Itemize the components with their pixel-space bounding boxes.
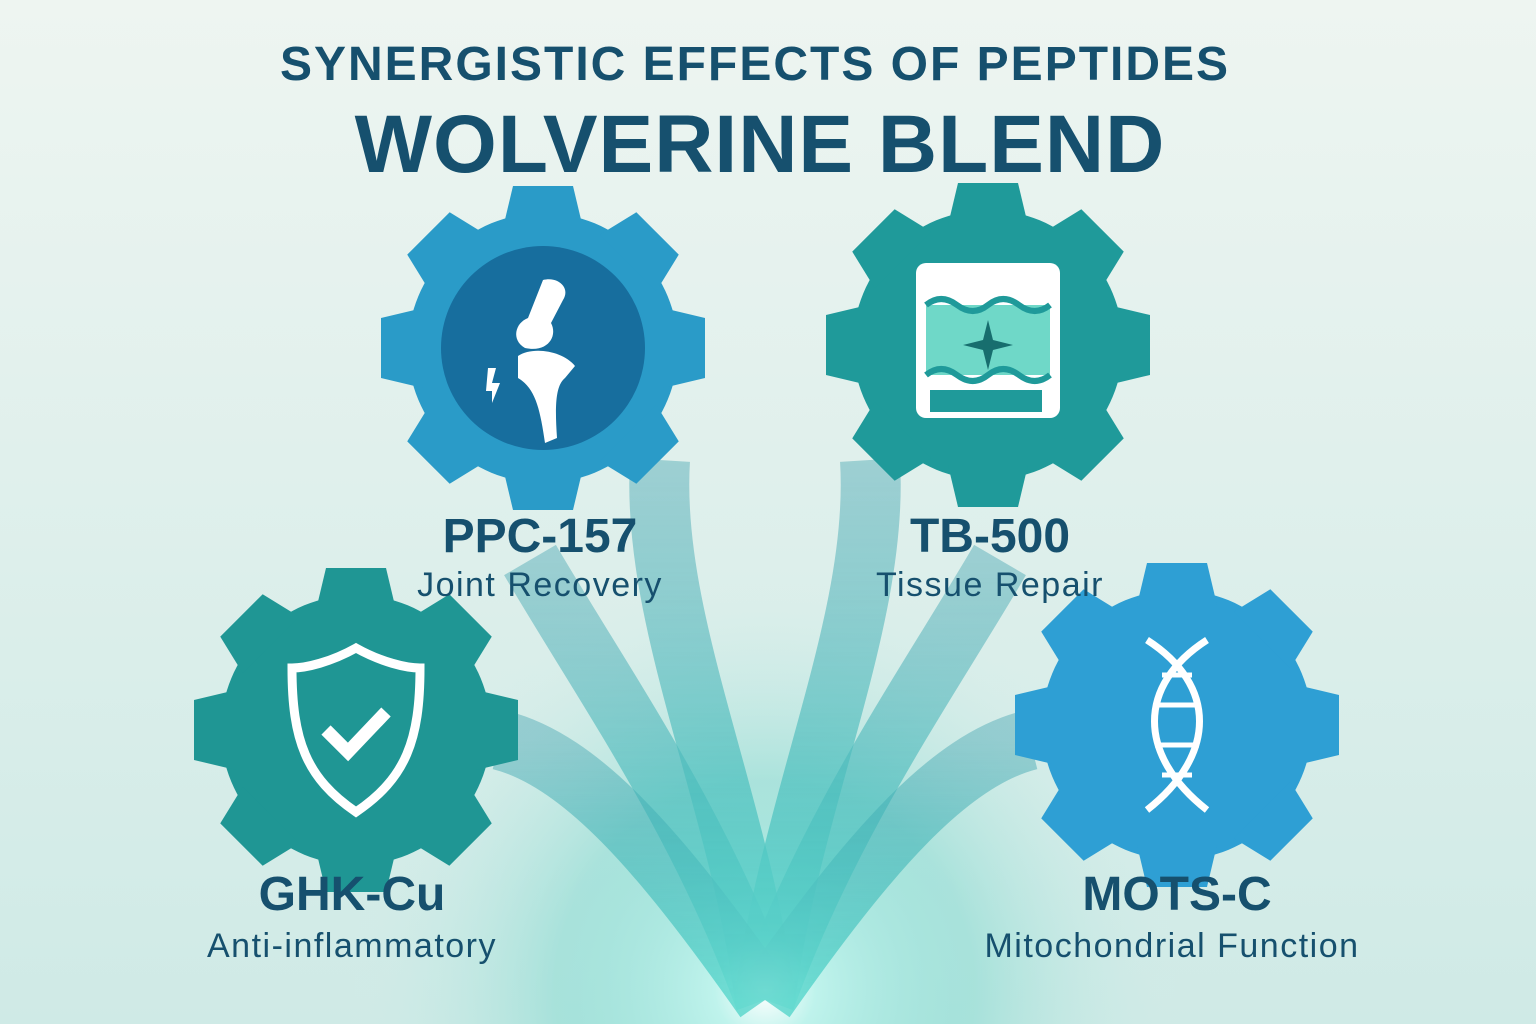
labels [207,510,1360,965]
labels: PPC-157 [443,510,637,563]
title: SYNERGISTIC EFFECTS OF PEPTIDES [280,38,1230,91]
labels: TB-500 [910,510,1070,563]
gear: TB-500 [826,183,1150,507]
title [280,38,1230,190]
icon: knee joint [486,279,575,443]
labels: Tissue Repair [876,566,1104,604]
icon: tissue [916,263,1060,418]
gear: GHK-Cu [194,568,518,892]
light rays [500,460,1030,1000]
labels: GHK-Cu [259,868,445,921]
gear: PPC-157 [381,186,705,510]
gear: MOTS-C [1015,563,1339,887]
icon: DNA [1147,640,1207,810]
labels: Mitochondrial Function [984,927,1360,965]
labels: Anti-inflammatory [207,927,497,965]
title: WOLVERINE BLEND [355,99,1165,190]
labels: Joint Recovery [417,566,663,604]
labels: MOTS-C [1082,868,1272,921]
icon: shield [292,648,420,812]
